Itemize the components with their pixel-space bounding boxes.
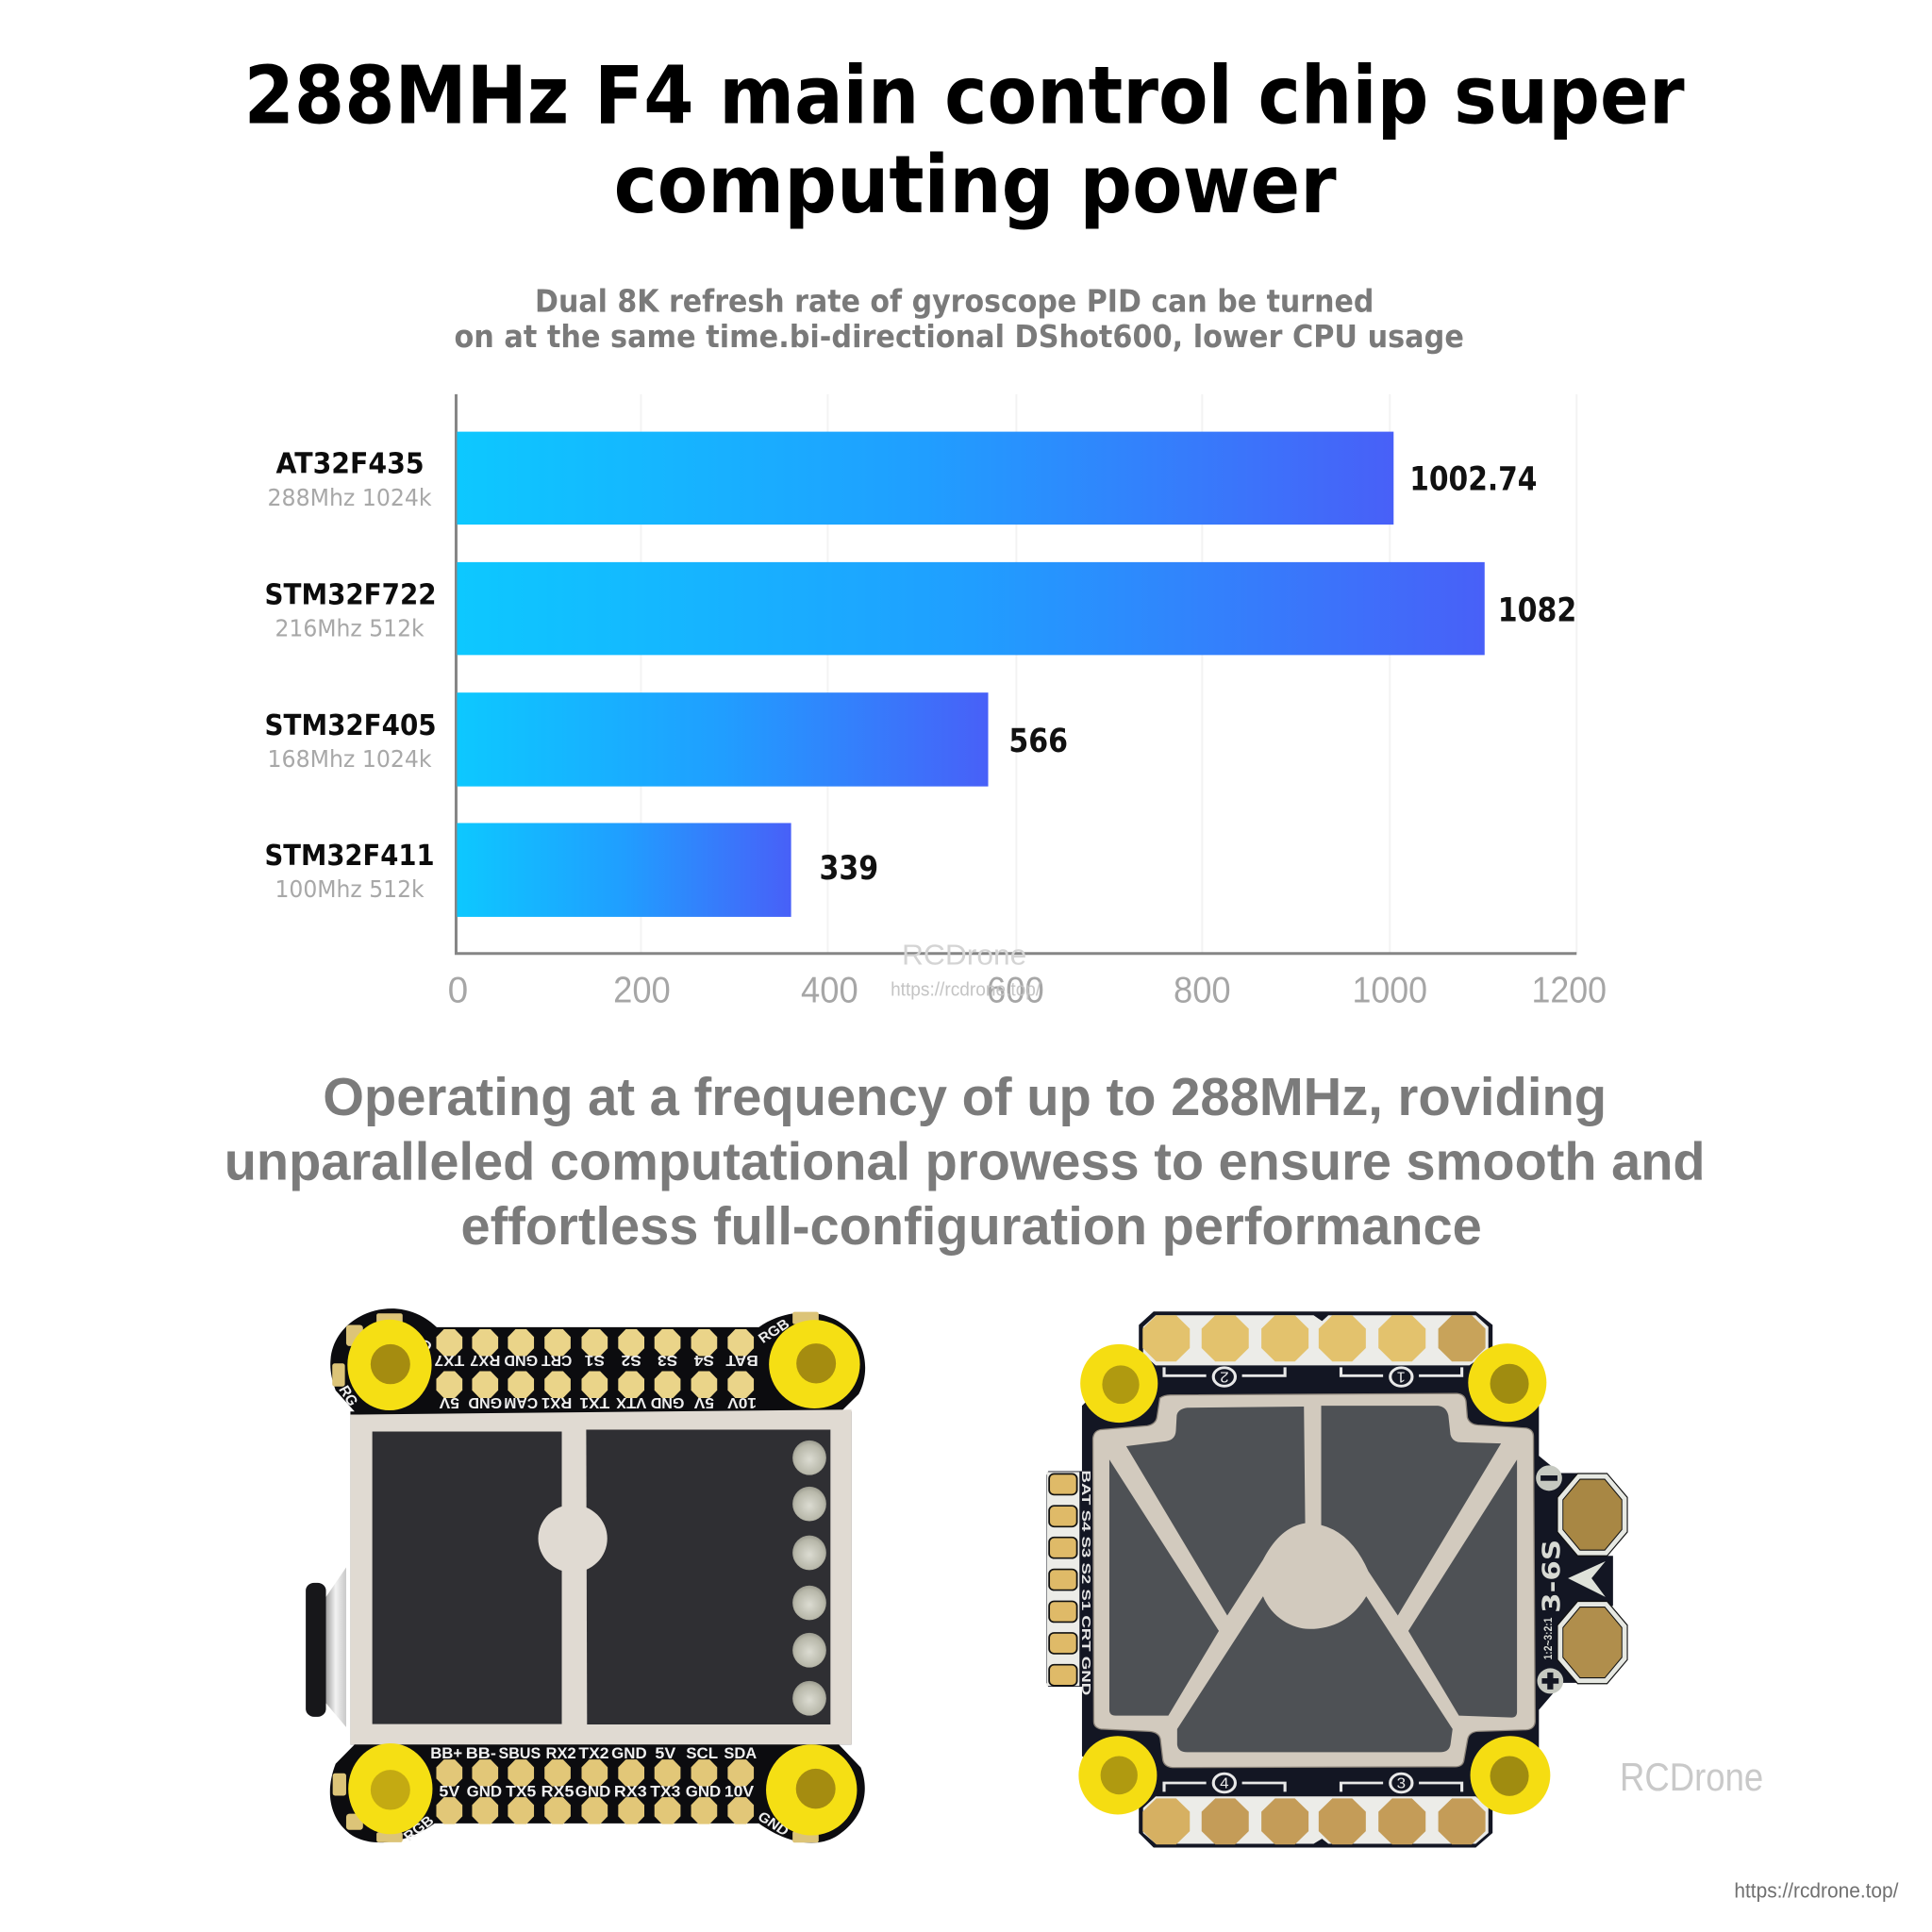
signal pads <box>1049 1474 1077 1686</box>
signal labels: BAT S4 S3 S2 S1 CRT GND <box>1079 1470 1092 1695</box>
motor pads bottom <box>1142 1798 1486 1844</box>
description paragraph: Operating at a frequency of up to 288MHz, roviding <box>323 1068 1607 1127</box>
corner silkscreen labels: GND <box>398 1324 436 1354</box>
bar chart <box>265 394 1607 1010</box>
corner silkscreen labels: RGB <box>756 1316 792 1346</box>
pad labels bottom: TX2 <box>578 1745 609 1762</box>
description paragraph: unparalleled computational prowess to ensure smooth and <box>225 1132 1706 1191</box>
pad labels upside down <box>434 1352 758 1411</box>
chip name labels: STM32F405 <box>265 709 437 742</box>
watermark on chart: https://rcdrone.top/ <box>891 979 1041 1000</box>
metal shield <box>350 1409 852 1744</box>
pad labels upside down: CAM <box>504 1394 538 1411</box>
pad labels bottom: RX2 <box>546 1745 576 1762</box>
motor brackets silkscreen <box>1164 1367 1462 1792</box>
minus mark <box>1536 1465 1562 1491</box>
chip spec labels: 288Mhz 1024k <box>268 484 432 511</box>
chip spec labels: 100Mhz 512k <box>275 875 425 903</box>
pad labels bottom <box>430 1745 757 1801</box>
pad labels bottom: RX3 <box>614 1783 647 1801</box>
corner silkscreen labels: RG <box>335 1383 360 1408</box>
metal shield <box>1093 1393 1535 1768</box>
motor numbers: 2 <box>1220 1368 1229 1385</box>
dark shield panels <box>1109 1406 1517 1752</box>
pad labels upside down: VTX <box>616 1394 646 1411</box>
pad labels upside down: S3 <box>658 1352 677 1369</box>
watermark on chart: RCDrone <box>902 939 1026 972</box>
bar: STM32F405 <box>457 692 989 787</box>
pad labels upside down: GND <box>468 1394 502 1411</box>
motor numbers: 4 <box>1220 1775 1229 1791</box>
value labels <box>819 460 1576 888</box>
pad labels upside down: TX7 <box>434 1352 464 1369</box>
pad labels bottom: 5V <box>439 1783 460 1801</box>
pad labels bottom: BB+ <box>430 1745 462 1762</box>
value labels: 339 <box>819 850 878 888</box>
pad labels bottom: SCL <box>686 1745 718 1762</box>
pad labels bottom: GND <box>611 1745 647 1762</box>
chip name labels: STM32F722 <box>265 579 437 612</box>
axis tick labels: 1000 <box>1353 970 1427 1010</box>
pad labels upside down: S4 <box>693 1352 714 1369</box>
pad labels bottom: TX5 <box>506 1783 537 1801</box>
voltage label: 3-6S <box>1538 1540 1566 1613</box>
chart axes <box>456 394 1576 954</box>
value labels: 1082 <box>1498 592 1576 630</box>
pad labels upside down: 5V <box>440 1394 459 1411</box>
corner silkscreen labels <box>335 1316 792 1844</box>
edge pads <box>332 1312 819 1842</box>
pad labels upside down: 10V <box>727 1394 757 1411</box>
LEDs <box>792 1441 826 1716</box>
title <box>244 49 1685 231</box>
solder pads bottom <box>436 1759 754 1824</box>
cell count label: 1:2~3:2:1 <box>1543 1618 1555 1659</box>
motor pads top <box>1142 1315 1486 1361</box>
watermark on chart <box>891 939 1041 1000</box>
pad labels upside down: BAT <box>725 1352 758 1369</box>
standoffs <box>1078 1343 1550 1814</box>
bar: STM32F411 <box>457 823 791 917</box>
subtitle <box>454 283 1464 355</box>
power pads <box>1557 1474 1627 1684</box>
flight controller board <box>306 1308 865 1844</box>
pad labels upside down: RX1 <box>541 1394 572 1411</box>
axis tick labels: 800 <box>1174 970 1231 1010</box>
pad labels upside down: CRT <box>541 1352 572 1369</box>
axis tick labels: 600 <box>987 970 1044 1010</box>
shield center disc <box>539 1505 608 1573</box>
PCB <box>330 1308 865 1842</box>
description paragraph <box>225 1068 1706 1257</box>
site url: https://rcdrone.top/ <box>1734 1878 1899 1902</box>
axis tick labels: 0 <box>448 970 468 1010</box>
pad labels bottom: GND <box>686 1783 721 1801</box>
pad labels bottom: BB- <box>466 1745 496 1762</box>
pad labels bottom: SDA <box>724 1745 757 1762</box>
pad labels bottom: SBUS <box>499 1745 541 1762</box>
black panels <box>373 1429 830 1724</box>
value labels: 1002.74 <box>1409 460 1537 498</box>
chip name labels: AT32F435 <box>275 447 425 480</box>
solder pads top <box>436 1329 754 1398</box>
pad labels upside down: S1 <box>585 1352 605 1369</box>
title: computing power <box>614 139 1337 231</box>
pad labels upside down: GND <box>504 1352 538 1369</box>
motor numbers: 3 <box>1397 1775 1406 1791</box>
pad labels bottom: GND <box>575 1783 610 1801</box>
title: 288MHz F4 main control chip super <box>244 49 1685 142</box>
standoffs <box>347 1320 860 1835</box>
chip spec labels: 216Mhz 512k <box>275 614 425 641</box>
pad labels bottom: RX5 <box>541 1783 575 1801</box>
axis tick labels <box>448 970 1607 1010</box>
USB connector <box>306 1568 346 1727</box>
pad labels bottom: 10V <box>724 1783 755 1801</box>
description paragraph: effortless full-configuration performance <box>460 1197 1482 1257</box>
corner silkscreen labels: RGB <box>401 1813 438 1844</box>
value labels: 566 <box>1008 723 1068 760</box>
watermark bottom right: RCDrone <box>1620 1755 1763 1799</box>
terminal strips <box>1143 1315 1489 1843</box>
signal pad strip <box>1046 1472 1079 1686</box>
pad labels upside down: RX7 <box>470 1352 500 1369</box>
axis tick labels: 1200 <box>1532 970 1607 1010</box>
pad labels upside down: GND <box>651 1394 684 1411</box>
plus mark <box>1538 1668 1563 1693</box>
chip name labels <box>265 447 437 873</box>
chip spec labels <box>268 484 432 903</box>
motor numbers: 1 <box>1397 1368 1406 1385</box>
subtitle: on at the same time.bi-directional DShot600, lower CPU usage <box>454 319 1464 355</box>
axis tick labels: 400 <box>801 970 858 1010</box>
axis tick labels: 200 <box>613 970 671 1010</box>
pad labels bottom: GND <box>467 1783 502 1801</box>
subtitle: Dual 8K refresh rate of gyroscope PID can be turned <box>535 283 1374 319</box>
pad labels upside down: 5V <box>694 1394 714 1411</box>
bar: AT32F435 <box>457 432 1393 525</box>
chip name labels: STM32F411 <box>265 840 435 873</box>
PCB <box>1046 1311 1613 1848</box>
pad labels bottom: 5V <box>655 1745 676 1762</box>
logo chevron <box>1568 1561 1606 1597</box>
ESC board <box>1046 1311 1627 1848</box>
motor numbers <box>1220 1368 1406 1791</box>
pad labels bottom: TX3 <box>650 1783 680 1801</box>
corner silkscreen labels: GND <box>755 1809 791 1840</box>
chip spec labels: 168Mhz 1024k <box>268 745 432 773</box>
bar: STM32F722 <box>457 562 1485 655</box>
pad labels upside down: S2 <box>622 1352 641 1369</box>
pad labels upside down: TX1 <box>579 1394 609 1411</box>
